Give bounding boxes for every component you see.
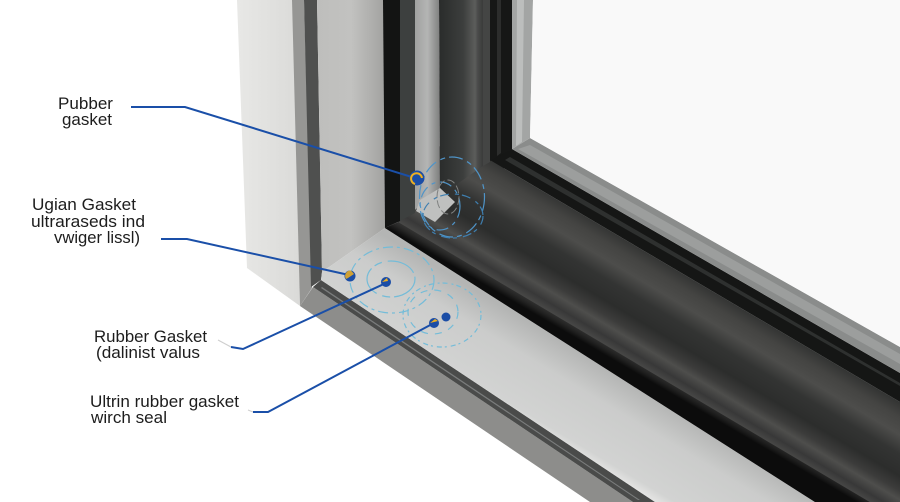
vertical black glazing band <box>490 0 512 161</box>
glazing band highlight line <box>505 157 900 386</box>
label: Ugian Gasket: ultraraseds ind <box>31 212 145 231</box>
label: Rubber Gasket: Rubber Gasket <box>94 327 207 346</box>
marker: upper <box>410 170 424 186</box>
bottom grey frame band <box>300 287 633 502</box>
label: Ultrin rubber gasket <box>90 392 239 427</box>
leader line: top <box>131 107 415 178</box>
label: Pubber gasket: gasket <box>62 110 112 129</box>
vertical dark column <box>439 0 483 196</box>
black glazing band horizontal <box>490 149 900 402</box>
inner wall face <box>317 0 385 272</box>
horizontal dark frame <box>385 160 900 502</box>
label: Ugian Gasket: vwiger lissl) <box>54 228 140 247</box>
vertical dark grey column <box>400 0 415 221</box>
shadow along sill <box>385 222 900 502</box>
label: Rubber Gasket <box>94 327 207 362</box>
callout rings: sill <box>350 247 481 347</box>
label: Rubber Gasket: (dalinist valus <box>96 343 200 362</box>
label: Pubber gasket: Pubber <box>58 94 113 113</box>
leader line: second <box>161 239 349 275</box>
notch diamond <box>416 188 455 222</box>
vertical black column <box>383 0 400 228</box>
marker: sill lower <box>429 318 439 328</box>
outer grey trim strip <box>292 0 312 306</box>
bottom dark band <box>313 280 655 502</box>
marker: sill left <box>344 270 356 282</box>
corner backing behind frame <box>398 140 512 235</box>
window frame illustration <box>237 0 900 502</box>
label: Ugian Gasket <box>31 195 145 247</box>
leader line: fourth <box>248 323 434 412</box>
vertical light column <box>415 0 440 210</box>
sill surface <box>321 228 815 502</box>
marker: sill lower right <box>442 312 450 322</box>
label: Ultrin rubber gasket: wirch seal <box>90 408 167 427</box>
bead highlight <box>518 145 900 364</box>
leader line: third <box>218 283 386 349</box>
label: Pubber gasket <box>58 94 113 129</box>
glass <box>530 0 900 347</box>
marker: sill centre <box>381 277 391 287</box>
label: Ugian Gasket: Ugian Gasket <box>32 195 136 214</box>
callout rings: upper <box>420 157 484 238</box>
dark trim strip <box>304 0 322 287</box>
light glazing bead horizontal <box>512 138 900 373</box>
outer wall face <box>237 0 300 306</box>
bottom band highlight <box>321 287 640 500</box>
vertical light glazing bead <box>512 0 533 149</box>
label: Ultrin rubber gasket: Ultrin rubber gasket <box>90 392 239 411</box>
